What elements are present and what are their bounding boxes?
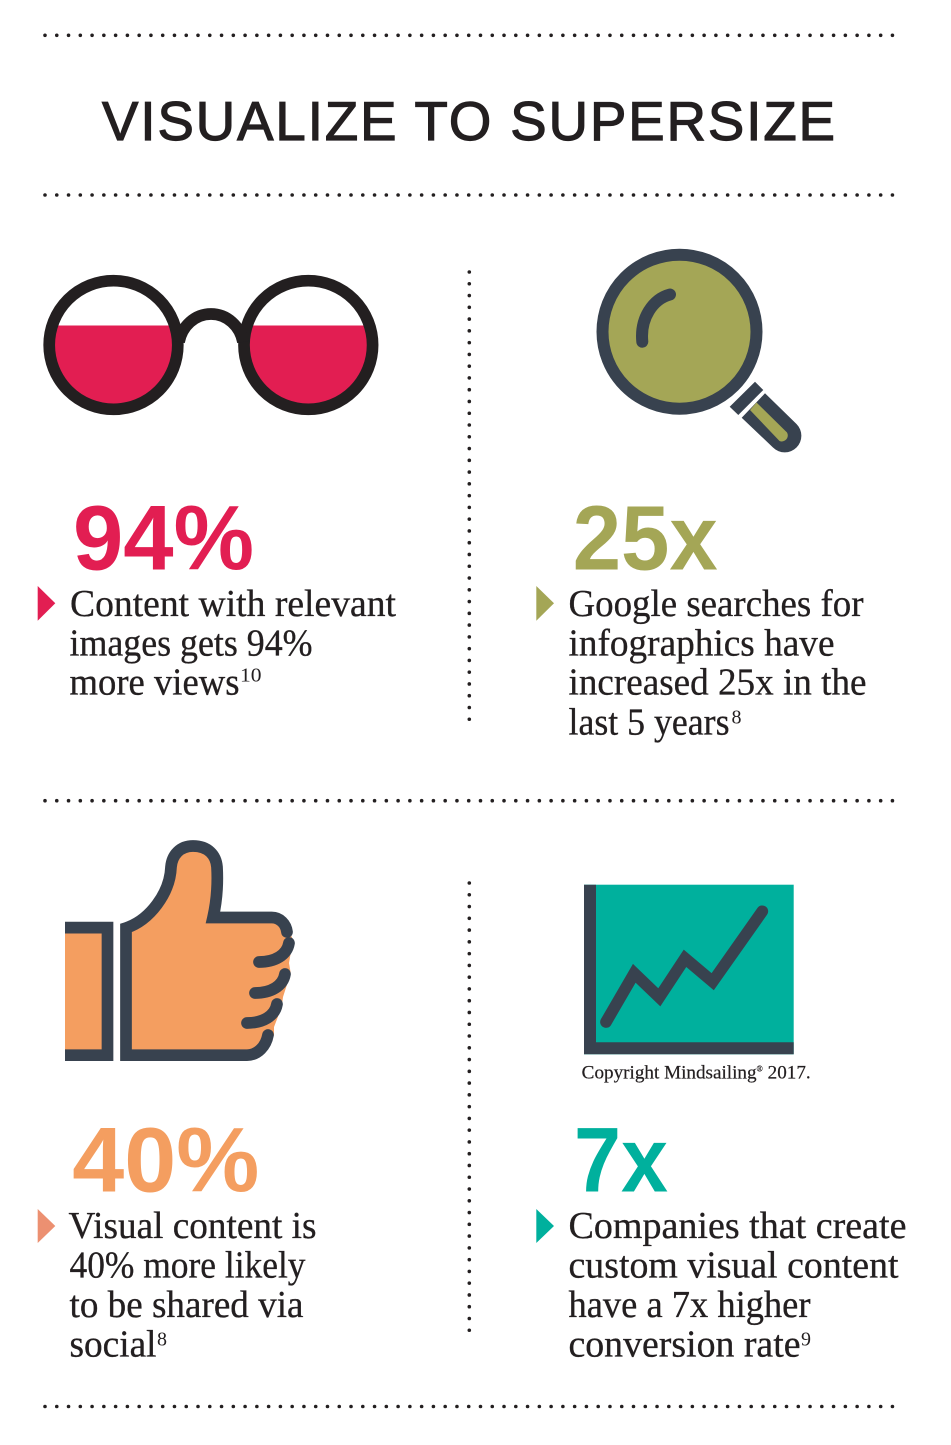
stat: 94%: 94% xyxy=(73,487,254,589)
text block: 25x description: Google searches for xyxy=(568,583,864,625)
text block: 7x description: have a 7x higher xyxy=(568,1284,811,1326)
text block: 40% description: 40% more likely xyxy=(70,1245,306,1287)
text block: 25x description: 8 xyxy=(732,706,742,728)
stat: 40%: 40% xyxy=(72,1110,259,1212)
panel: 94% more views xyxy=(38,281,396,703)
copyright caption: ® xyxy=(757,1064,763,1074)
copyright caption: Copyright Mindsailing xyxy=(582,1064,751,1084)
arrow marker xyxy=(536,586,554,621)
arrow marker xyxy=(38,586,55,621)
text block: 7x description xyxy=(568,1205,906,1365)
text block: 40% description: social xyxy=(70,1323,156,1365)
text block: 94% description xyxy=(70,583,396,703)
icon: magnifying glass xyxy=(602,255,801,452)
text block: 7x description: custom visual content xyxy=(568,1245,899,1287)
text block: 7x description: 9 xyxy=(801,1328,811,1350)
text block: 94% description: images gets 94% xyxy=(70,622,312,664)
text block: 40% description: 8 xyxy=(157,1328,167,1350)
text block: 25x description: increased 25x in the xyxy=(568,661,866,703)
stat: 7x: 7x xyxy=(574,1110,668,1212)
icon: glasses xyxy=(49,281,373,409)
stat: 25x: 25x xyxy=(573,487,718,589)
text block: 40% description xyxy=(68,1205,316,1365)
title: VISUALIZE TO SUPERSIZE xyxy=(102,91,835,152)
copyright caption: 2017. xyxy=(763,1064,811,1084)
text block: 94% description: more views xyxy=(70,661,240,703)
text block: 40% description: to be shared via xyxy=(70,1284,304,1326)
icon: thumbs up xyxy=(65,846,293,1055)
icon: line chart xyxy=(584,885,794,1054)
text block: 40% description: Visual content is xyxy=(68,1205,316,1247)
text block: 7x description: Companies that create xyxy=(568,1205,906,1247)
arrow marker xyxy=(536,1209,554,1243)
text block: 7x description: conversion rate xyxy=(568,1323,800,1365)
panel: 25x searches xyxy=(536,255,866,744)
text block: 94% description: Content with relevant xyxy=(70,583,396,625)
panel: 40% shared xyxy=(38,846,316,1365)
text block: 94% description: 10 xyxy=(240,664,262,686)
text block: 25x description xyxy=(568,583,866,744)
arrow marker xyxy=(38,1209,55,1243)
text block: 25x description: infographics have xyxy=(568,622,834,664)
panel: 7x conversion xyxy=(536,885,906,1365)
text block: 25x description: last 5 years xyxy=(568,702,730,744)
